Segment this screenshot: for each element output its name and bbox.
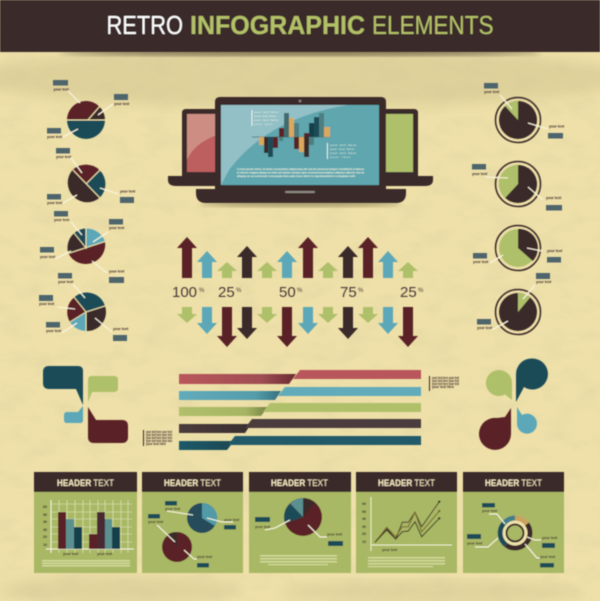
screen text blocks: your text here [254,110,278,114]
pie gauge 3, right column [473,226,563,270]
panel 2 lower pie [162,532,192,562]
panel 4 chart: 40 [362,517,366,521]
panel 4 caption [368,557,445,567]
screen text blocks [237,110,364,178]
pie gauge 3, right column: your text [547,249,563,253]
percentage labels: 25 [400,284,417,301]
pie chart 4, left column: your text [58,280,74,284]
arrows pointing up [177,237,418,278]
pie chart 4, left column: your text [46,329,62,333]
pie gauge 2, right column: your text [472,172,488,176]
pie chart 4, left column: your text [39,302,55,306]
panel 1: bar chart [34,472,137,573]
pie gauge 2, right column [472,162,562,210]
screen text blocks: your text here [330,147,354,151]
panel 2 labels: your text [148,520,164,524]
laptops illustration [168,97,433,207]
panel 4 chart: 20 [362,532,366,536]
panel 2 labels [148,501,240,568]
screen text blocks: your text here [330,151,356,155]
panel 4: line chart [356,472,457,573]
panel 1 chart: 60 [43,505,47,509]
pie chart 3, left column: your text [54,218,70,222]
pie gauge 4, right column [477,273,552,334]
pie chart 1, left column: your text [54,88,69,92]
pie chart 1, left column: your text [47,135,63,139]
panel 3: pie chart [249,472,351,573]
percentage labels: % [199,288,205,294]
panel 3 labels [255,517,343,546]
panel 2 labels: your text [224,518,240,522]
small text block, right of stripes: your text here [432,385,454,389]
panel 4 chart: 30 [362,525,366,529]
panel 2: two pie charts [142,472,243,573]
small text block, right of stripes [429,376,460,391]
small text block, right of stripes: your text here your text [432,382,460,386]
panel 1 chart: 30 [43,528,47,532]
small text block, left of stripes [143,430,173,446]
pie gauge 1, right column [484,83,565,142]
panel 4 chart: 60 [362,502,366,506]
panel 4 chart [362,497,452,552]
panel 3 heading: HEADER TEXT [271,478,328,489]
screen text blocks: your text here [330,143,356,147]
panel 5 heading: HEADER TEXT [485,478,542,489]
pie gauge 1, right column: your text [484,90,500,94]
pie chart 3, left column: your text [109,226,125,230]
panel 4 chart: 50 [362,510,366,514]
title: ELEMENTS [372,10,494,40]
panel 5 labels: your text [542,536,558,540]
panel 3 labels: your text [327,532,343,536]
stepped stripes [179,370,421,450]
panel 1 chart [43,500,134,556]
panel 5 labels [467,503,558,568]
pie gauge 4, right column: your text [477,326,493,330]
panel 5 labels: your text [467,542,483,546]
screen text blocks: your text here [254,118,278,122]
panel 3 pie [284,498,322,536]
percentage labels: % [236,288,242,294]
panel 1 heading: HEADER TEXT [57,478,114,489]
pie gauge 1, right column: your text [549,124,565,128]
percentage labels: 100 [172,284,197,301]
pie chart 2, left column [47,148,136,205]
screen text blocks: your text [330,155,350,159]
pie gauge 3, right column: your text [473,260,489,264]
screen text blocks: aliquip ex ea commodo consequat duis aute irure dolor in reprehenderit in voluptate velit [237,174,355,178]
panel 1 chart: 50 [43,513,47,517]
small text block, left of stripes: your text here your text [146,439,173,443]
percentage labels: 25 [218,284,235,301]
percentage labels: % [358,288,364,294]
pie chart 3, left column: your text [40,255,56,259]
title: RETRO [106,10,183,40]
percentage labels: 75 [340,284,357,301]
main laptop [196,97,406,203]
small text block, right of stripes: your text here your text [432,376,460,380]
small text block, left of stripes: your text here your text [146,430,173,434]
panel 4 heading: HEADER TEXT [378,478,435,489]
pie chart 2, left column: your text [120,190,136,194]
screen text blocks: et dolore magna aliqua ut enim ad minim veniam quis nostrud exercitation ullamco laboris nisi ut [237,170,364,174]
right laptop [360,109,433,186]
arrows pointing down [177,307,418,347]
screen text blocks: your text here [254,114,276,118]
pie gauge 2, right column: your text [546,196,562,200]
panel 2 upper pie [187,503,217,533]
panel 2 labels: your text [197,555,213,559]
small text block, left of stripes: your text here your text [146,433,173,437]
panel 3 labels: your text [255,525,271,529]
panel 5 labels: your text [482,509,498,513]
pie chart 3, left column: your text [109,270,125,274]
panel 1 chart: 10 [43,543,47,547]
percentage labels: % [418,288,424,294]
percentage labels [172,284,424,301]
title: INFOGRAPHIC [190,10,365,40]
panel 2 heading: HEADER TEXT [164,478,221,489]
pie chart 4, left column: your text [113,327,129,331]
header bar [0,0,600,56]
title [106,10,494,40]
panel 1 chart: 40 [43,520,47,524]
panel 2 labels: your text [165,507,181,511]
panel 5 labels: your text [540,555,556,559]
panel 1 chart: 20 [43,535,47,539]
screen text blocks: your text [254,122,272,126]
pie chart 3, left column [40,211,125,283]
panel 1 chart: your text [97,552,113,556]
small text block, left of stripes: your text here your text [146,436,173,440]
left laptop [168,109,240,186]
panel 5 donut [498,516,532,550]
pie chart 4, left column [39,273,129,341]
percentage labels: 50 [279,284,296,301]
pie gauge 4, right column: your text [536,280,552,284]
speech bubbles, left [43,366,128,443]
panel 1 caption [42,560,130,566]
panel 5: donut chart [463,472,564,573]
panel 4 chart: 10 [362,540,366,544]
pie chart 2, left column: your text [56,155,72,159]
percentage labels: % [297,288,303,294]
panel 3 caption [260,555,337,565]
screen text blocks: Lorem ipsum dolor sit amet consectetur adipiscing elit sed do eiusmod tempor incididunt ut labore [237,167,364,171]
laptop screen bar chart [252,113,330,157]
small text block, left of stripes: your text here [146,442,166,446]
panel 4 chart: your text [382,548,398,552]
pie chart 1, left column [47,80,130,139]
pie chart 1, left column: your text [114,102,130,106]
round speech bubbles, right [479,358,548,450]
pie chart 2, left column: your text [47,201,63,205]
panel 1 chart: your text [63,552,79,556]
small text block, right of stripes: your text here your text [432,379,460,383]
